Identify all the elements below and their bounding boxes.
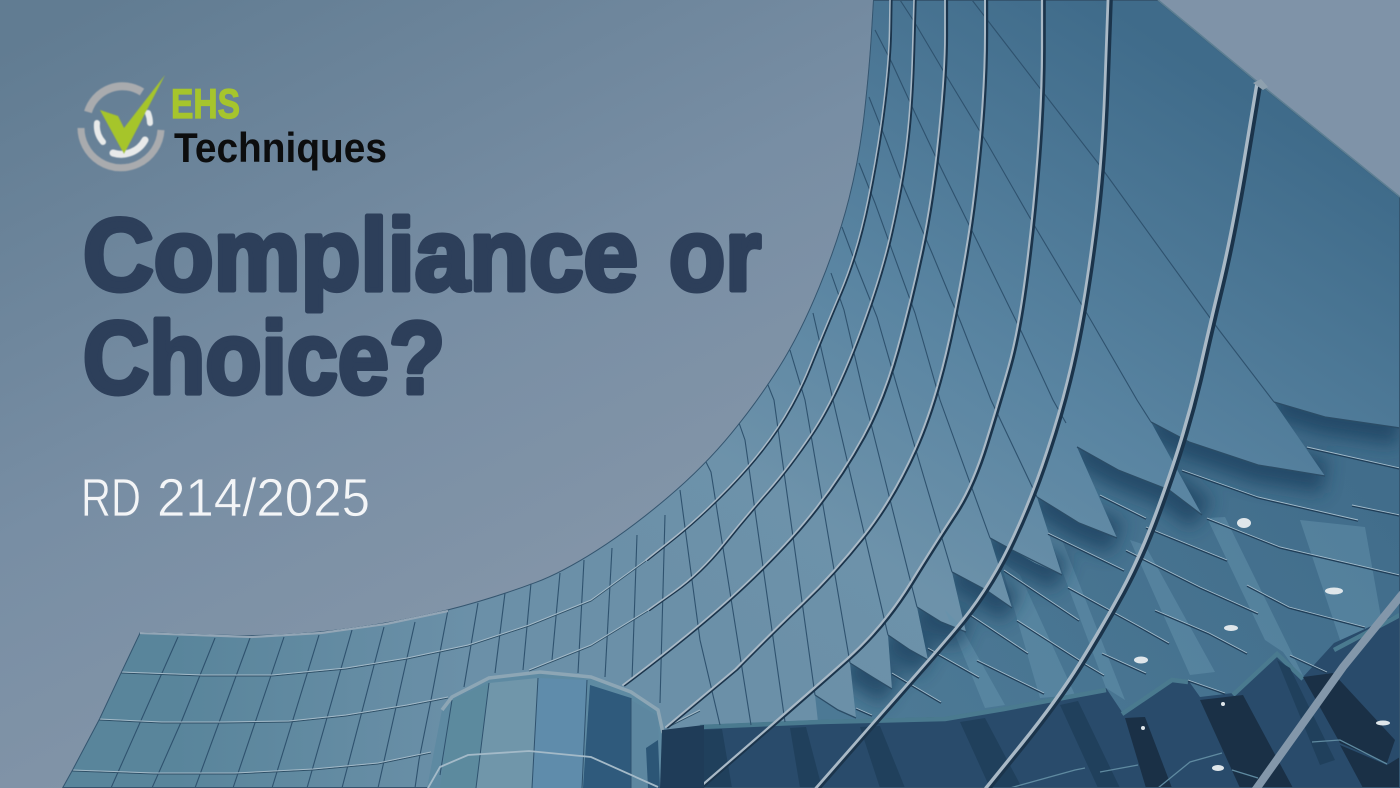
- check mark: [100, 75, 165, 154]
- curved rib highlights: [623, 0, 1257, 788]
- logo: EHS Techniques: [81, 75, 387, 171]
- subtitle RD: RD: [81, 468, 141, 528]
- title: [83, 198, 761, 415]
- ring inner arcs: [97, 113, 150, 154]
- tower roof band: [442, 672, 663, 733]
- left wing floor lines shadow: [72, 561, 700, 774]
- right roof edge: [1158, 0, 1400, 197]
- sail edge lines: [815, 402, 1400, 718]
- left roof edge highlight: [140, 611, 448, 637]
- ring outer arcs: [81, 86, 161, 168]
- reflection floor lines shadow: [856, 448, 1400, 716]
- reflected light strips: [945, 517, 1385, 708]
- base columns: [704, 660, 1335, 788]
- reflection floor lines: [856, 447, 1400, 715]
- tower ring band: [428, 751, 658, 788]
- subtitle: [81, 468, 370, 528]
- dark wedge beside tower: [660, 725, 704, 788]
- tower lower dark notch: [646, 740, 660, 788]
- subtitle number: 214/2025: [157, 468, 370, 528]
- title word Compliance: Compliance: [83, 198, 638, 312]
- tower panel dark: [583, 685, 631, 788]
- dark base band: [700, 613, 1400, 788]
- title word or: or: [669, 198, 761, 312]
- lower arcs on the dark base: [1010, 740, 1387, 788]
- tower panel left: [440, 683, 489, 788]
- tower body: [427, 672, 663, 788]
- roof bracket: [1253, 79, 1268, 90]
- logo icon: ring and check: [81, 75, 165, 168]
- base band highlight: [700, 615, 1400, 727]
- darkest reflected blocks: [1125, 673, 1400, 788]
- sky top right corner: [1158, 0, 1400, 197]
- logo word EHS: EHS: [171, 80, 240, 127]
- left wing floor lines: [72, 560, 700, 773]
- foreground diagonal rib: [1254, 592, 1400, 788]
- title line 2: Choice?: [83, 301, 445, 415]
- curved rib shadows: [625, 0, 1260, 788]
- tower panel light: [476, 678, 538, 788]
- cylindrical tower: [427, 672, 663, 788]
- ceiling light spots: [1134, 518, 1390, 771]
- shadow under the sail edges: [850, 402, 1400, 689]
- tower mullion lines: [440, 678, 631, 788]
- tower panel blue: [532, 678, 587, 788]
- reflected facade: [815, 422, 1399, 720]
- lower left wing shading: [64, 632, 338, 787]
- tower panel right: [631, 700, 660, 788]
- logo word Techniques: Techniques: [174, 124, 387, 171]
